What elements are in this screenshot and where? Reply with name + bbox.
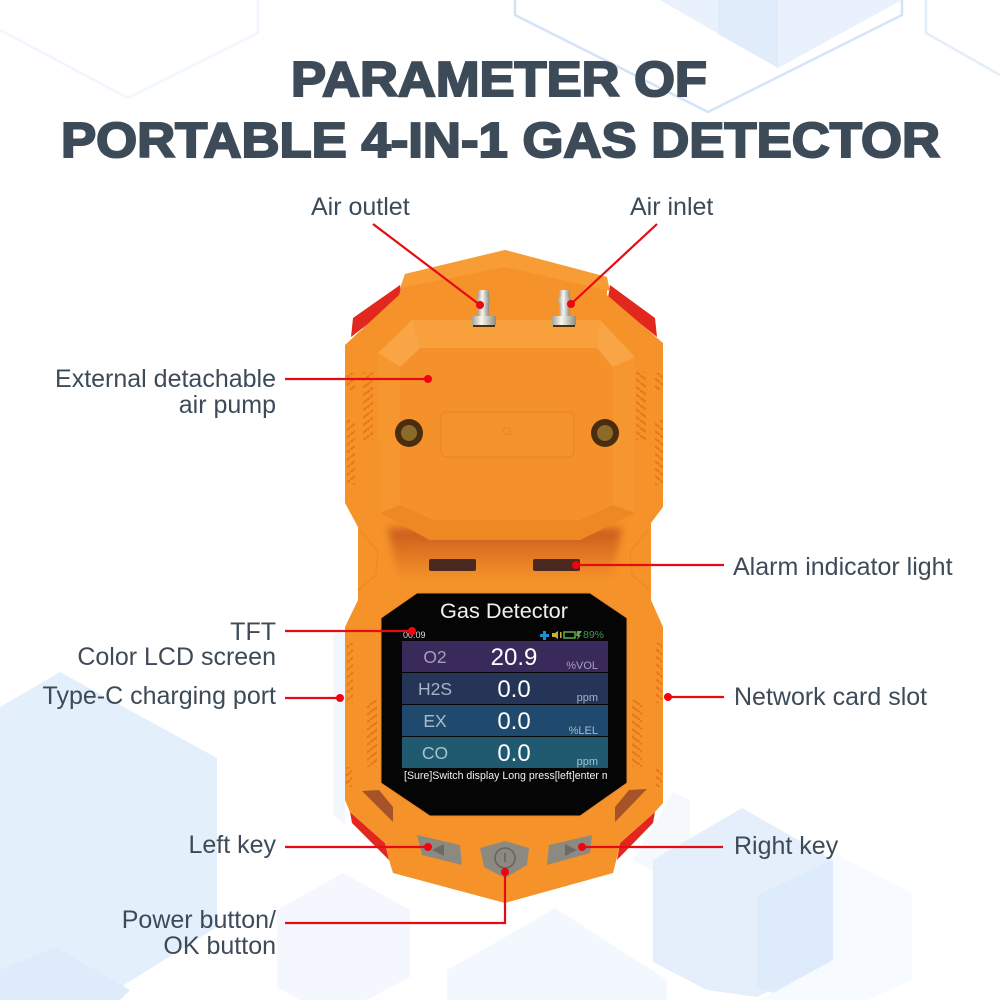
label: power button / OK button: OK button — [163, 932, 276, 960]
alarm indicator lights — [429, 559, 580, 571]
reading row EX: 0.0 — [497, 708, 531, 735]
label: TFT color LCD screen — [77, 618, 416, 671]
reading row O2: O2 — [423, 647, 447, 667]
neck side ridges — [358, 530, 650, 590]
label: air inlet — [567, 193, 713, 308]
air pump housing — [378, 320, 635, 540]
red rubber corners — [350, 285, 657, 860]
label: power button / OK button — [122, 868, 509, 960]
gas detector device — [345, 250, 663, 903]
neck shading — [388, 528, 622, 580]
label: alarm indicator light — [572, 553, 953, 581]
left key — [417, 835, 462, 865]
vents — [346, 372, 663, 787]
orange body — [345, 250, 663, 903]
top ridge — [400, 250, 610, 291]
reading row H2S: ppm — [577, 692, 598, 704]
label: external detachable air pump — [55, 365, 432, 419]
reading row EX: %LEL — [569, 725, 598, 737]
label: left key — [188, 831, 432, 859]
label: type-c charging port: Type-C charging port — [43, 682, 276, 710]
label: left key: Left key — [188, 831, 276, 859]
reading row O2: 20.9 — [491, 644, 537, 671]
side windows — [362, 789, 647, 822]
left screw — [395, 419, 423, 447]
reading row CO — [402, 737, 608, 768]
reading row H2S — [402, 673, 608, 704]
reading row O2: %VOL — [566, 660, 598, 672]
reading row H2S: 0.0 — [497, 676, 531, 703]
label: air outlet: Air outlet — [311, 193, 410, 221]
status icons — [540, 629, 604, 641]
centre mark — [504, 428, 510, 434]
reading row O2 — [402, 641, 608, 672]
right key — [547, 835, 592, 865]
label: right key: Right key — [734, 832, 839, 860]
nameplate recess — [441, 412, 574, 457]
label: alarm indicator light: Alarm indicator light — [733, 553, 953, 581]
label: network card slot: Network card slot — [734, 683, 927, 711]
right screw — [591, 419, 619, 447]
LCD screen — [381, 593, 628, 816]
label: TFT color LCD screen: Color LCD screen — [77, 643, 276, 671]
reading row CO: ppm — [577, 756, 598, 768]
reading row H2S: H2S — [418, 679, 452, 699]
label: external detachable air pump: External detachable — [55, 365, 276, 393]
status icons: 89% — [583, 629, 604, 641]
power button — [480, 841, 529, 878]
title: PORTABLE 4-IN-1 GAS DETECTOR — [61, 114, 940, 168]
label: power button / OK button: Power button/ — [122, 906, 276, 934]
label: air inlet: Air inlet — [630, 193, 713, 221]
screen title: Gas Detector — [440, 600, 568, 623]
air outlet nozzle — [472, 290, 496, 327]
reading row EX: EX — [423, 711, 447, 731]
title — [61, 53, 940, 168]
reading row CO: 0.0 — [497, 740, 531, 767]
reading row EX — [402, 705, 608, 737]
label: right key — [578, 832, 839, 860]
clock: 00:09 — [403, 630, 426, 640]
label: external detachable air pump: air pump — [179, 391, 276, 419]
screen hint text: [Sure]Switch display Long press[left]enter menu — [404, 770, 628, 782]
label: air outlet — [311, 193, 484, 309]
reading row CO: CO — [422, 743, 448, 763]
title: PARAMETER OF — [291, 53, 707, 107]
air inlet nozzle — [552, 290, 576, 327]
label: TFT color LCD screen: TFT — [230, 618, 276, 646]
